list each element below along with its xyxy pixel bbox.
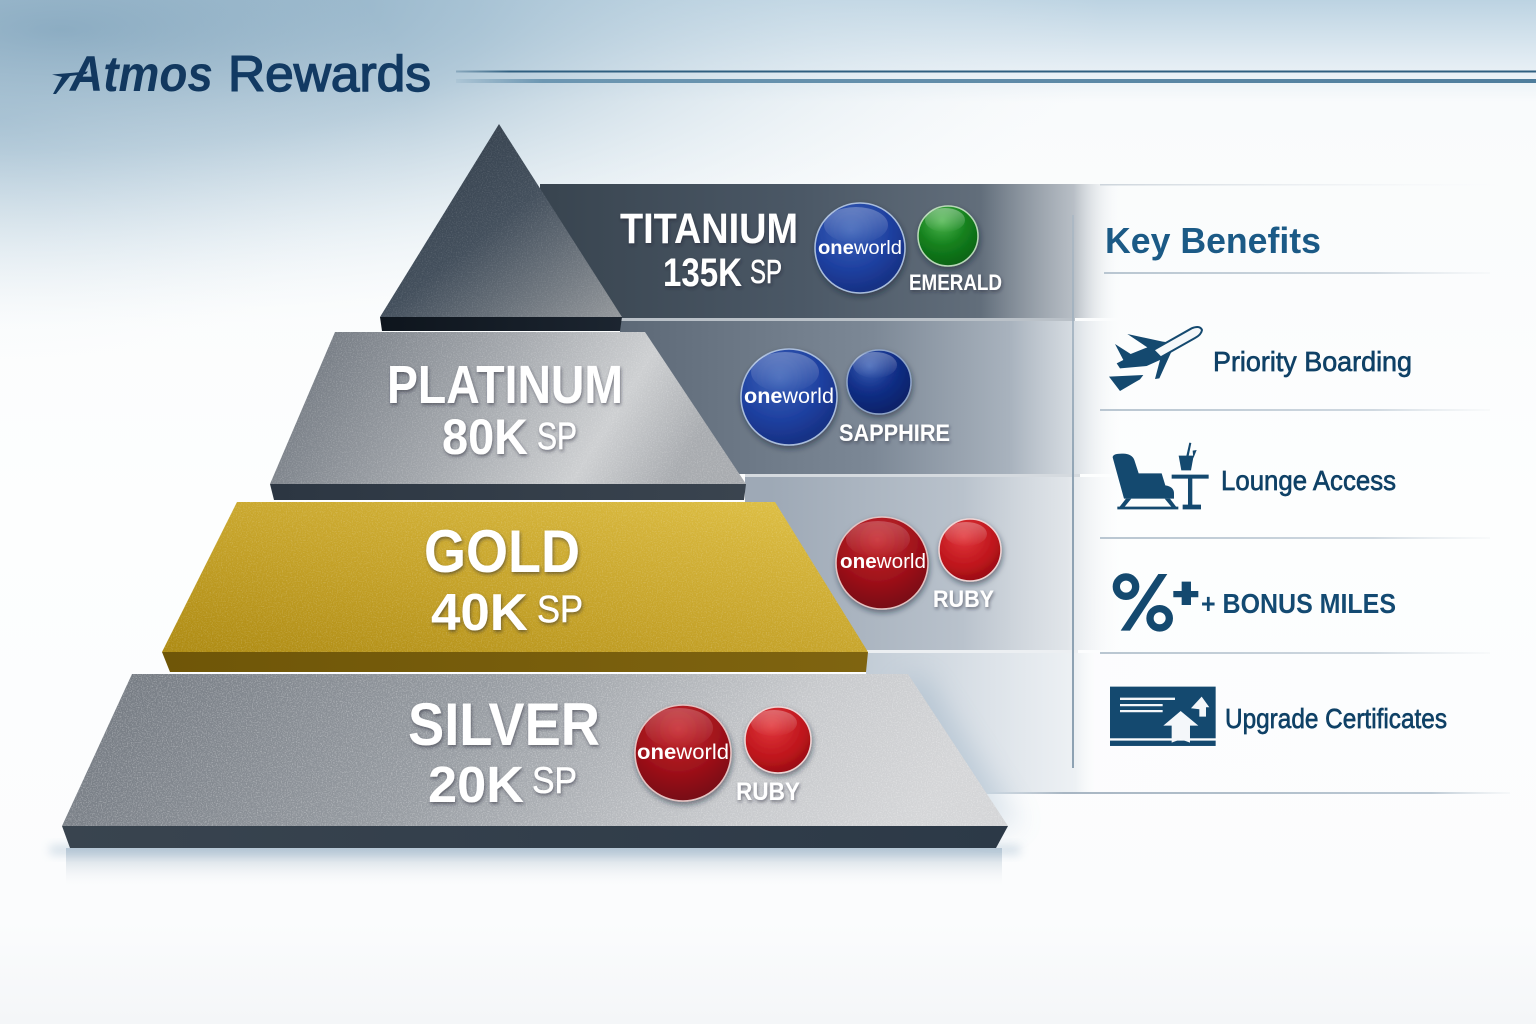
floor reflection bbox=[50, 846, 1020, 886]
badge: gold oneworld ruby bbox=[836, 517, 1001, 613]
titanium label: 135K bbox=[663, 251, 742, 295]
tier: silver: SILVER bbox=[408, 691, 600, 758]
badge: silver oneworld ruby bbox=[635, 705, 811, 806]
titanium label bbox=[620, 205, 798, 295]
icon: plane bbox=[1109, 327, 1202, 391]
icon: upgrade certificate bbox=[1110, 687, 1216, 746]
benefit: upgrade certificates: Upgrade Certificates bbox=[1225, 703, 1447, 734]
badge: titanium oneworld emerald: EMERALD bbox=[909, 270, 1002, 295]
badge: gold oneworld ruby: RUBY bbox=[933, 586, 994, 613]
titanium label: SP bbox=[750, 253, 782, 290]
badge: silver oneworld ruby: RUBY bbox=[736, 778, 800, 806]
badge: silver oneworld ruby: oneworld bbox=[637, 741, 729, 764]
benefit: priority boarding: Priority Boarding bbox=[1213, 346, 1412, 377]
title: Atmos bbox=[68, 46, 213, 102]
tier: titanium bbox=[380, 124, 622, 331]
tier bands bbox=[540, 184, 1510, 794]
title: Rewards bbox=[228, 46, 431, 102]
tier: platinum bbox=[270, 332, 746, 500]
tier: platinum: 80K bbox=[442, 409, 528, 465]
heading: key benefits: Key Benefits bbox=[1105, 220, 1321, 261]
titanium label: TITANIUM bbox=[620, 205, 798, 253]
tier: platinum: SP bbox=[537, 416, 577, 458]
key benefits panel bbox=[1072, 215, 1490, 768]
benefit: bonus miles: + BONUS MILES bbox=[1201, 588, 1396, 619]
badge: platinum oneworld sapphire: SAPPHIRE bbox=[839, 420, 950, 447]
tier: silver: 20K bbox=[428, 756, 524, 813]
badge: titanium oneworld emerald: oneworld bbox=[818, 238, 902, 259]
badge: platinum oneworld sapphire bbox=[741, 349, 950, 447]
tier: platinum: PLATINUM bbox=[387, 355, 623, 415]
title bbox=[52, 46, 431, 102]
tier: gold bbox=[162, 502, 868, 672]
pyramid bbox=[62, 124, 1022, 848]
tier: gold: SP bbox=[537, 589, 583, 631]
icon: lounge chair and table bbox=[1113, 443, 1209, 509]
badge: titanium oneworld emerald bbox=[815, 203, 1002, 295]
badge: platinum oneworld sapphire: oneworld bbox=[744, 385, 834, 408]
tier: gold: GOLD bbox=[424, 518, 580, 585]
tier: gold: 40K bbox=[431, 584, 528, 642]
benefit: lounge access: Lounge Access bbox=[1221, 465, 1396, 496]
icon: percent plus bbox=[1116, 574, 1198, 631]
tier: silver bbox=[62, 674, 1008, 848]
badge: gold oneworld ruby: oneworld bbox=[840, 551, 926, 573]
tier: silver: SP bbox=[532, 760, 577, 801]
